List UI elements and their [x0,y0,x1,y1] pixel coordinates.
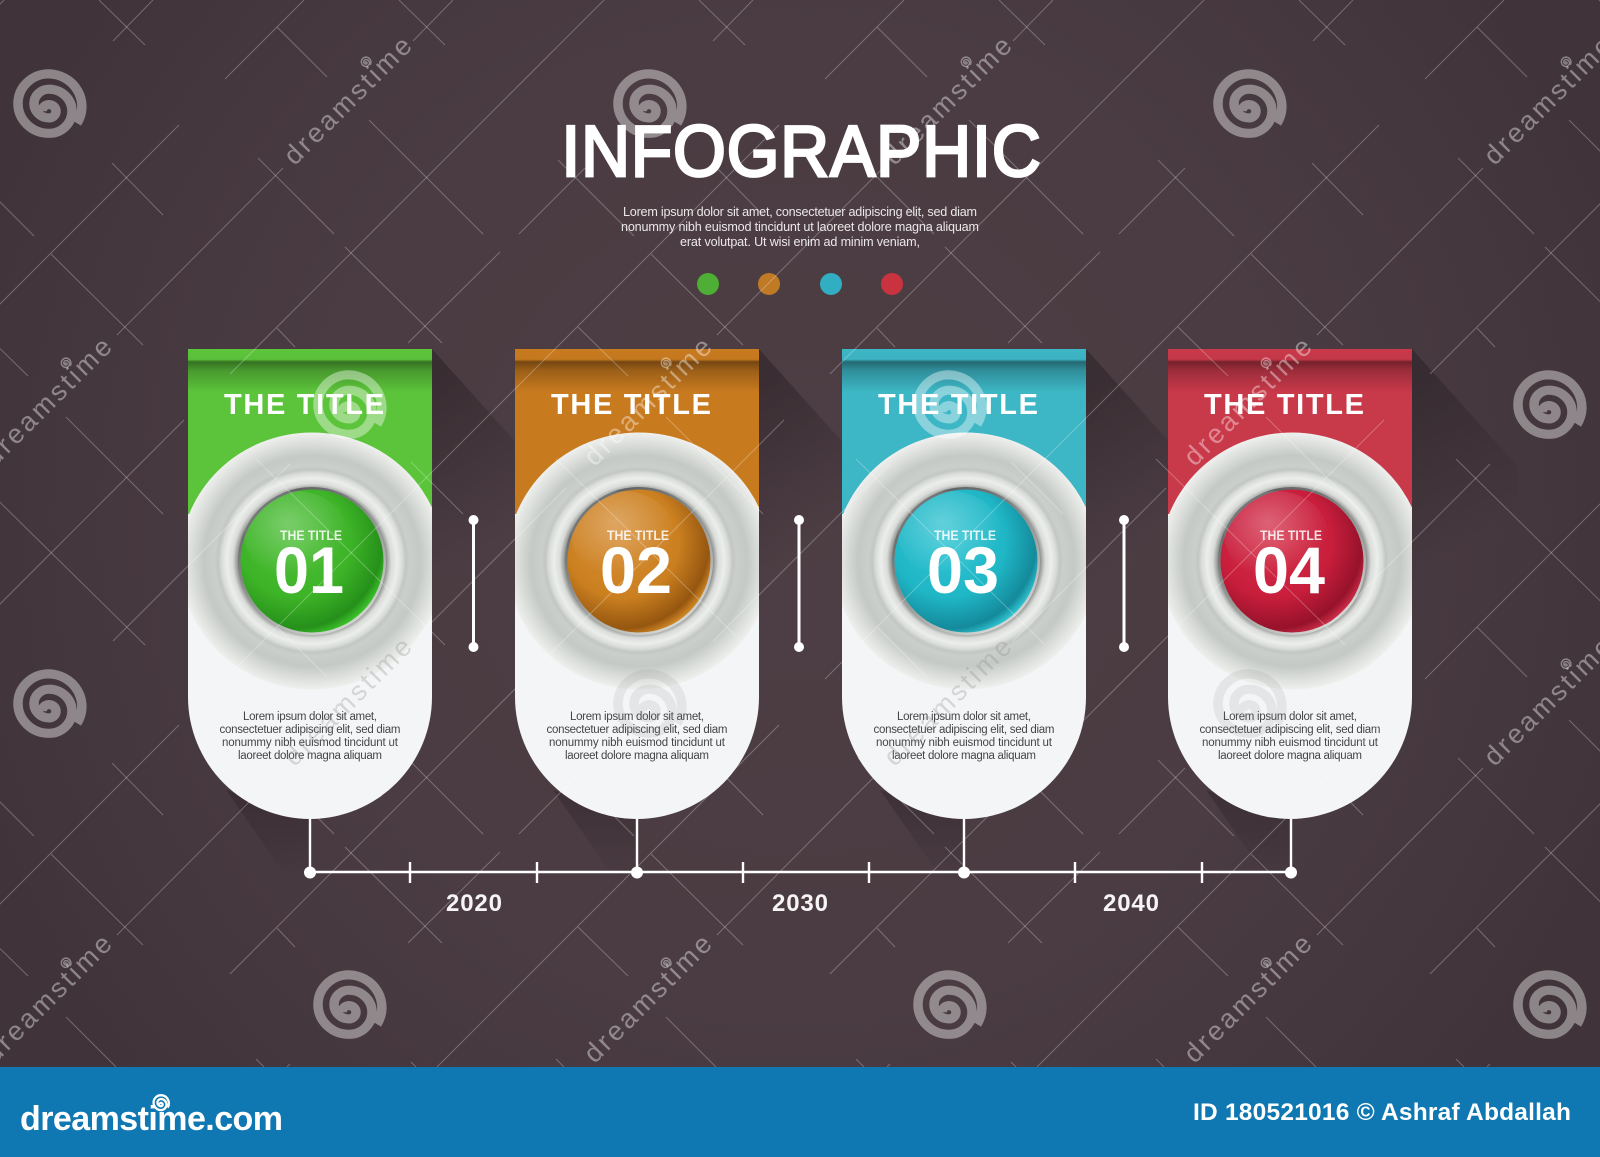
ball caption 03: THE TITLE [934,527,996,543]
footer credit: ID 180521016 © Ashraf Abdallah [1193,1099,1571,1126]
number 03: 03 [927,533,999,607]
long shadow 02 [553,349,865,885]
grey disc 03 [834,432,1098,690]
card body 03 [842,349,1086,819]
watermark overlay: dreamstime [1178,332,1318,472]
number 01: 01 [274,533,344,607]
intro text [621,205,979,249]
card text 04: nonummy nibh euismod tincidunt ut [1202,737,1379,749]
card text 02 [546,711,728,762]
year labels: 2040 [1103,890,1159,917]
ball caption 02: THE TITLE [607,527,669,543]
card text 04: laoreet dolore magna aliquam [1218,750,1362,762]
watermark overlay: dreamstime [1178,929,1318,1069]
card text 03: consectetuer adipiscing elit, sed diam [874,724,1054,736]
card text 02: laoreet dolore magna aliquam [565,750,709,762]
grey disc 02 [507,432,771,690]
timeline [304,819,1297,917]
card body 02 [515,349,759,819]
ribbon heading 02: THE TITLE [551,389,711,421]
year labels: 2020 [446,890,502,917]
ribbon heading 04: THE TITLE [1204,389,1364,421]
card text 03: Lorem ipsum dolor sit amet, [897,711,1031,723]
watermark overlay: dreamstime [878,31,1018,171]
ribbon 02 [515,349,759,514]
number 04: 04 [1253,533,1325,607]
glossy ball 03 [892,487,1040,635]
card text 03 [874,711,1054,762]
card text 01: nonummy nibh euismod tincidunt ut [222,737,399,749]
card text 02: consectetuer adipiscing elit, sed diam [546,724,728,736]
ribbon heading 03: THE TITLE [878,389,1038,421]
grey disc 01 [180,432,444,690]
grey disc 04 [1160,432,1424,690]
intro text: erat volutpat. Ut wisi enim ad minim veniam, [680,235,920,249]
glossy ball 01 [238,487,386,635]
vertical connectors between cards [468,515,1129,652]
ribbon 01 [188,349,432,514]
card text 04 [1200,711,1380,762]
watermark overlay: dreamstime [278,31,418,171]
glossy ball 04 [1218,487,1366,635]
ball caption 01: THE TITLE [280,527,342,543]
year labels: 2030 [772,890,828,917]
card text 04: Lorem ipsum dolor sit amet, [1223,711,1357,723]
long shadow 01 [226,349,538,885]
ribbon 03 [842,349,1086,514]
footer banner [0,1067,1600,1157]
card text 02: Lorem ipsum dolor sit amet, [570,711,704,723]
long shadow 03 [880,349,1192,885]
card text 01: Lorem ipsum dolor sit amet, [243,711,377,723]
panel: card 03 [842,349,1164,832]
long shadow 04 [1206,349,1518,885]
card body 01 [188,349,432,819]
panel: card 04 [1168,349,1478,827]
watermark overlay: dreamstime [578,929,718,1069]
panel: card 02 [515,349,840,831]
watermark overlay: dreamstime [878,632,1018,772]
watermark overlay: dreamstime [578,332,718,472]
card text 01 [220,711,400,762]
number 02: 02 [600,533,672,607]
card text 03: laoreet dolore magna aliquam [892,750,1036,762]
card body 04 [1168,349,1412,819]
footer logo spiral [154,1095,169,1110]
glossy ball 02 [565,487,713,635]
card text 01: laoreet dolore magna aliquam [238,750,382,762]
ribbon heading 01: THE TITLE [224,389,384,421]
intro text: Lorem ipsum dolor sit amet, consectetuer adipiscing elit, sed diam [623,205,977,219]
watermark overlay: dreamstime [278,632,418,772]
card text 02: nonummy nibh euismod tincidunt ut [549,737,726,749]
ball caption 04: THE TITLE [1260,527,1322,543]
year labels [446,890,1159,917]
card text 01: consectetuer adipiscing elit, sed diam [220,724,400,736]
title: INFOGRAPHIC [561,111,1041,191]
intro text: nonummy nibh euismod tincidunt ut laoreet dolore magna aliquam [621,220,979,234]
card text 04: consectetuer adipiscing elit, sed diam [1200,724,1380,736]
card text 03: nonummy nibh euismod tincidunt ut [876,737,1053,749]
footer logo text: dreamstime.com [20,1100,283,1138]
legend dots [697,273,903,295]
panel: card 01 [188,349,510,824]
ribbon 04 [1168,349,1412,514]
